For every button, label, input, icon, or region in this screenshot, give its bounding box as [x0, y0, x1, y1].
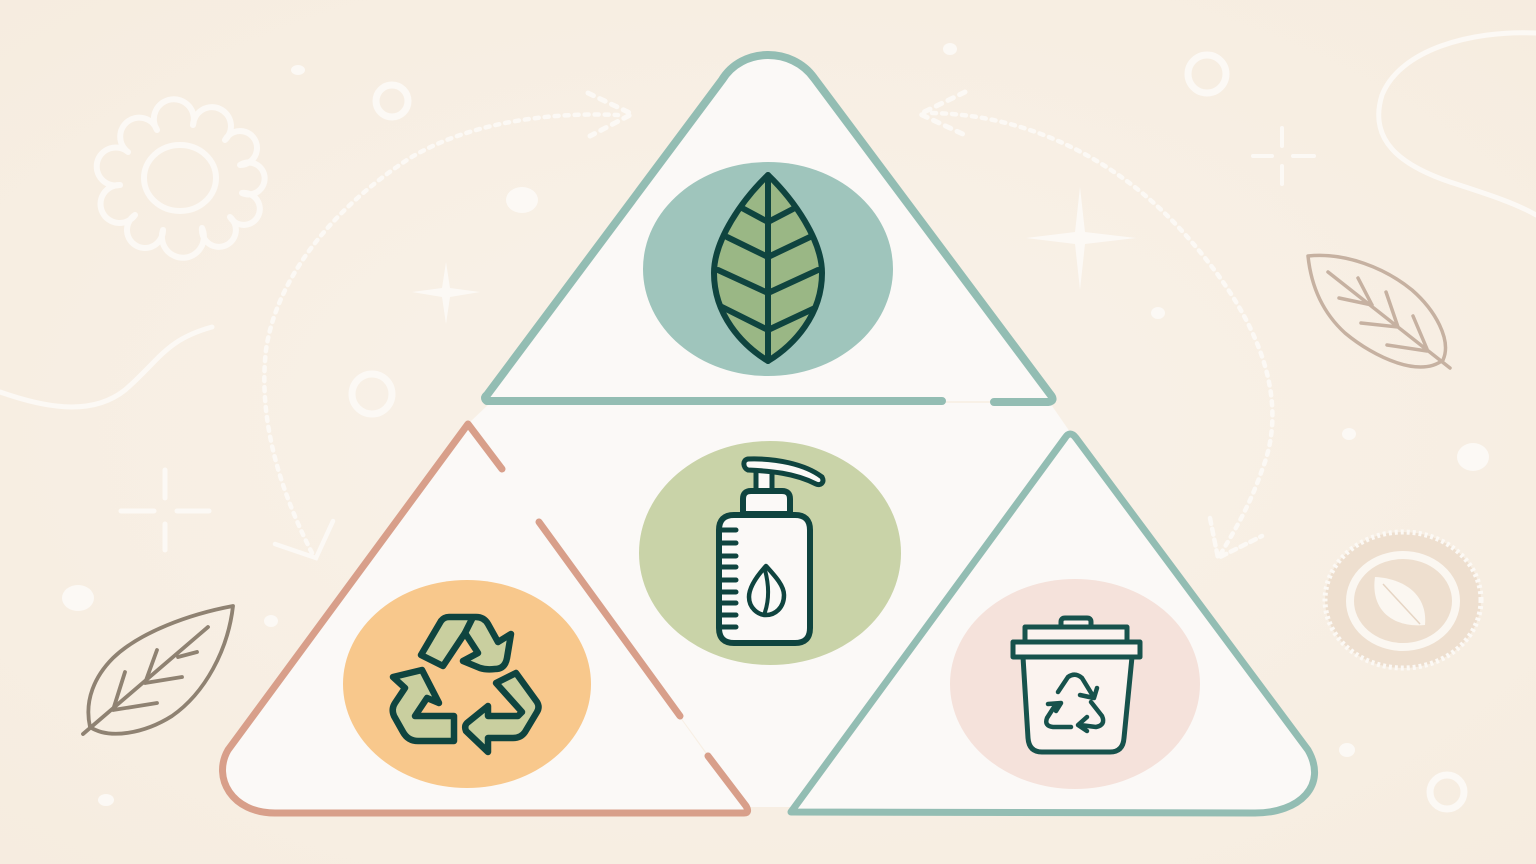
decoration: right leaf outline: [1308, 255, 1450, 368]
panel: center product shape: [639, 441, 901, 665]
arrow: dashed arc to top triangle: [264, 93, 632, 558]
decoration: sparkles: [121, 128, 1314, 550]
icon: pump bottle: [719, 459, 823, 643]
panel: top triangle: [485, 55, 1053, 402]
icon circle: sage: [639, 441, 901, 665]
decoration: flower outline: [97, 99, 265, 258]
arrow: dashed arc to right triangle: [920, 92, 1272, 558]
icon circle: orange: [343, 580, 591, 788]
decoration: left leaf outline: [83, 606, 233, 734]
panel: left triangle: [223, 424, 748, 813]
icon: recycling arrows: [393, 617, 538, 752]
decoration: wavy lines: [0, 33, 1536, 407]
icon circle: blush: [950, 579, 1200, 789]
icon: leaf: [714, 175, 822, 361]
panel: white central field: [468, 403, 1070, 807]
badge: leaf seal: [1325, 532, 1481, 668]
panel: right triangle: [791, 434, 1315, 813]
icon: recycling bin: [1013, 618, 1140, 752]
icon circle: teal: [643, 162, 893, 376]
